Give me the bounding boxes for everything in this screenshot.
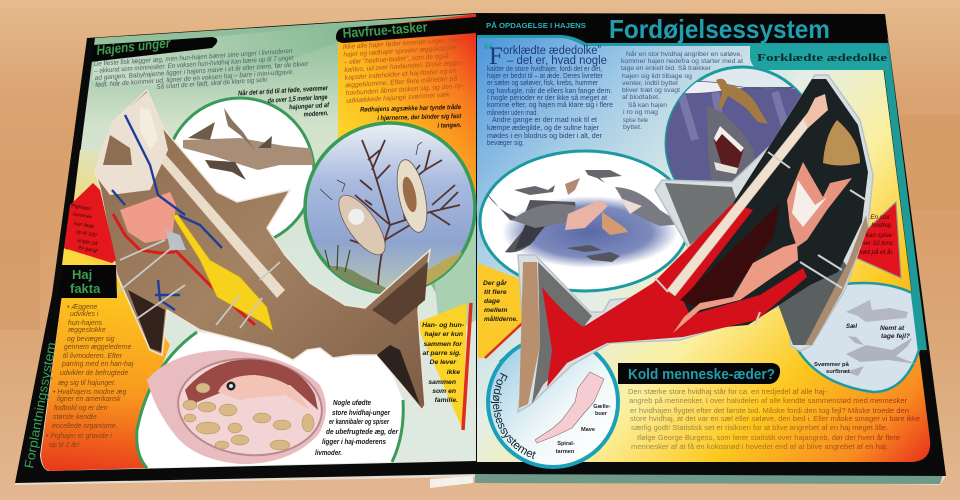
- kidney: [166, 230, 186, 250]
- right page background: [477, 35, 930, 462]
- text block: angreb på søløve: kommer hajen nedefra og starter med at: [621, 58, 743, 65]
- circle: sæl og surfbræt: surfbræt: [826, 369, 850, 375]
- text block: Haj fakta: æggestokke: [68, 327, 106, 334]
- text block: Kold menneske-æder: særlig godt! Statistisk set er risikoen for at blive angrebet af en haj meget lille.: [631, 423, 888, 432]
- text block: Haj fakta: • Æggene: [67, 304, 98, 311]
- text block: Forklædte ædedolke intro: og havfugle, når de ellers kan fange dem.: [487, 87, 612, 95]
- icon: søløve: [716, 79, 768, 124]
- callout: En stor hvidhaj: En stor: [870, 214, 891, 221]
- text block: Forklædte ædedolke intro: F: [489, 43, 503, 70]
- icon: surfbræt-silhuet: [846, 336, 916, 376]
- circle: Fordøjelsessystemet: Mave: [581, 427, 595, 433]
- text block: angreb på søløve: tage en enkelt bid. Så trækker: [621, 64, 712, 72]
- callout: Han- og hun-hajer: sammen for: [423, 341, 462, 348]
- text block: angreb på søløve: Så kan hajen: [628, 101, 667, 109]
- text note: Nogle ufødte: [315, 400, 399, 457]
- icon: æggekapsel venstre: [338, 194, 386, 256]
- text block: Kold menneske-æder: er hvidhajen flygtet efter det første bid. Måske fordi den tog fejl? Måske troede den: [630, 406, 909, 415]
- callout: Pighajen: Pighajen: [71, 203, 92, 212]
- callout: En stor hvidhaj: kan spise: [866, 232, 893, 239]
- text block: Havfrue-tasker: – eller ”havfrue-tasker”, som de også: [343, 52, 449, 66]
- text block: Kold menneske-æder: angreb på mennesker. I over halvdelen af alle kendte sammenstød med mennesker: [629, 396, 908, 405]
- pink stomach: [673, 243, 798, 333]
- icon: sæl: [846, 300, 908, 322]
- callout: Han- og hun-hajer: at parre sig.: [422, 350, 461, 357]
- callout: Pighajen: [62, 183, 116, 265]
- text block: Forklædte ædedolke intro: måneder uden mad.: [487, 109, 538, 117]
- icon: voksen haj: [183, 138, 314, 170]
- text block: angreb på søløve: [621, 50, 743, 131]
- shark shell: [518, 75, 873, 412]
- callout: Pighajen: kan føde: [74, 221, 95, 230]
- circle: sæl og surfbræt: Svømmer på: [814, 361, 850, 368]
- text note: Nogle ufødte: store hvidhaj-unger: [332, 410, 391, 417]
- side label: Forplantningssystem: Forplantningssystem: [21, 341, 59, 470]
- text block: Haj fakta: udvikler de befrugtede: [60, 370, 128, 377]
- circle: Fordøjelsessystemet: Gælle-: [593, 404, 611, 410]
- text block: Havfrue-tasker: havbunden åbner tasken sig, og den ny-: [346, 82, 464, 97]
- liver: [680, 203, 780, 307]
- text note: Nogle ufødte: de ubefrugtede æg, der: [326, 429, 399, 436]
- text block: Forklædte ædedolke intro: kalder de store hvidhajer, fordi det er det,: [487, 66, 602, 73]
- icon: æg: [183, 383, 314, 450]
- text block: Hajens unger: ad gangen. Babyhajerne ligger i hajens mave i et år eller mere, før de bliver: [95, 60, 309, 82]
- text block: Forklædte ædedolke intro: kæmpe ædegilde, og de sultne hajer: [487, 125, 600, 132]
- text block: Forklædte ædedolke intro: er sæler og søløver, fisk, krebs, hummer: [487, 80, 599, 87]
- text block: Kold menneske-æder: mennesker af at få en kokosnød i hovedet end af at blive angrebet af en haj.: [631, 442, 888, 451]
- dark shading: [128, 290, 165, 352]
- callout: Han- og hun-hajer: som en: [432, 388, 456, 395]
- circle: sæl og surfbræt: Sæl: [846, 324, 857, 330]
- text block: Kold menneske-æder: Den stærke store hvidhaj står for ca. en tredjedel af alle haj-: [628, 387, 828, 396]
- text block: Forklædte ædedolke intro: “: [483, 37, 494, 62]
- circular label: Fordøjelsessystemet: [490, 372, 536, 459]
- circle: livmoder: [137, 332, 403, 468]
- text block: Havfrue-tasker: kaldes, ud over havbunden. Disse ægge-: [344, 60, 463, 74]
- icon: hvidhaj: [707, 106, 754, 182]
- callout: Der går tit flere dage: tit flere: [484, 289, 507, 296]
- text block: Forklædte ædedolke intro: [483, 37, 613, 147]
- left shark model: [95, 90, 430, 410]
- icon: hajfoster: [218, 375, 310, 410]
- icon: tang-grene: [350, 140, 460, 285]
- text block: Haj fakta: • Hvalhajens modne æg: [53, 389, 126, 396]
- text block: Havfrue-tasker: hajer og rødhajer spreder æggekapsler: [343, 44, 458, 59]
- yellow tube: [172, 215, 273, 331]
- panel: Havfrue-tasker background: [338, 14, 476, 215]
- circle: Fordøjelsessystemet: [486, 343, 620, 469]
- text block: Forklædte ædedolke intro: I nogle perioder er der ikke så meget at: [487, 94, 607, 102]
- icon: sten og tang: [328, 266, 386, 292]
- text block: Forklædte ædedolke intro: bevæger sig.: [487, 140, 524, 147]
- callout: Pighajen: op til 100: [75, 229, 97, 239]
- panel: Haj fakta: fakta: [70, 281, 101, 296]
- book page edges: [15, 470, 946, 488]
- panel: Haj fakta: [58, 265, 117, 298]
- header kicker: PÅ OPDAGELSE I HAJENS: [486, 21, 586, 30]
- text block: Hajens unger: født. Når de kommer ud, ligner de en voksen haj – bare i mini-udgave.: [95, 68, 294, 89]
- shark body: [95, 90, 430, 410]
- callout: Pighajen: unger på: [77, 237, 98, 247]
- text block: angreb på søløve: bliver træt og svagt: [622, 87, 680, 94]
- right strip green panel: [430, 200, 476, 340]
- circle: haj angriber søløve: [664, 66, 802, 182]
- callout: Pighajen: én gang!: [77, 245, 99, 254]
- cream spine tube: [667, 97, 825, 296]
- icon: haj stor: [488, 194, 576, 252]
- text block: Hajens unger: Så snart de er født, skal de klare sig selv.: [156, 75, 269, 91]
- text note: Rødhajens ægsække: [360, 103, 462, 132]
- text block: Hajens unger: De fleste fisk lægger æg, men hun-hajen bærer sine unger i livmoderen: [94, 48, 293, 68]
- text block: Haj fakta: [46, 304, 134, 449]
- text block: Forklædte ædedolke intro: mødes i en blodrus og bider i alt, der: [487, 133, 603, 140]
- clear rods: [655, 152, 866, 325]
- icon: små hajer: [585, 170, 622, 183]
- text block: Havfrue-tasker: Ikke alle hajer føder levende unger. Hun-: [343, 36, 464, 51]
- text note: Når det er tid: Når det er tid til at føde, svømmer: [238, 84, 329, 97]
- blue lines: [112, 115, 222, 310]
- callout: Han- og hun-hajer: [416, 303, 471, 430]
- left page background: [40, 14, 476, 471]
- text block: angreb på søløve: byttet.: [623, 124, 642, 131]
- heading: Kold menneske-æder: Kold menneske-æder?: [628, 366, 775, 383]
- pink gill arches: [787, 162, 852, 247]
- callout: En stor hvidhaj: hvidhaj: [871, 222, 892, 229]
- callout: Han- og hun-hajer: Han- og hun-: [422, 322, 465, 329]
- text block: Haj fakta: største kendte: [53, 414, 97, 421]
- text block: Forklædte ædedolke intro: – det er, hvad nogle: [507, 55, 607, 67]
- callout: Han- og hun-hajer: familie.: [435, 397, 458, 404]
- left page cover (black): [15, 13, 477, 483]
- circle: sæl og surfbræt: [798, 283, 919, 392]
- heading: Hajens unger: Hajens unger: [96, 35, 172, 58]
- text block: Haj fakta: parring med en han-haj: [61, 361, 134, 368]
- callout: En stor hvidhaj: kød på et år.: [859, 249, 894, 256]
- circle: Fordøjelsessystemet: Spiral-: [557, 441, 575, 447]
- text note: Når det er tid: da over 1,5 meter lange: [267, 94, 328, 105]
- text block: angreb på søløve: i ro og mag: [623, 109, 658, 116]
- text block: Haj fakta: udvikles i: [70, 311, 99, 318]
- text block: Forklædte ædedolke intro: Andre gange er der mad nok til et: [492, 117, 597, 124]
- circle: sæl og surfbræt: Nemt at: [880, 325, 905, 332]
- callout: Der går tit flere dage: dage: [484, 298, 500, 305]
- text block: angreb på søløve: Når en stor hvidhaj angriber en søløve,: [626, 50, 742, 58]
- text block: Kold menneske-æder: store hvidhaj, at det var en sæl eller søløve, den bed i. Eller måske smager vi bare ikke: [630, 414, 920, 423]
- main title: Fordøjelsessystem: [609, 14, 830, 44]
- text block: Hajens unger: [93, 47, 310, 95]
- text note: Når det er tid: hajunger ud af: [289, 102, 330, 111]
- right page teal border: [880, 38, 927, 350]
- text block: Haj fakta: til livmoderen. Efter: [63, 353, 123, 360]
- circle: hajer i blodrus: [480, 151, 690, 291]
- text block: Haj fakta: hun-hajens: [68, 320, 103, 327]
- callout: Han- og hun-hajer: hajer er kun: [424, 331, 463, 338]
- circle: havfrue-tasker: [305, 123, 475, 300]
- text block: Forklædte ædedolke intro: orklædte ædedolke”: [503, 45, 601, 57]
- callout: Der går tit flere dage: Der går: [483, 279, 507, 287]
- right page cover (black): [476, 13, 946, 476]
- icon: livmoder: [147, 350, 326, 464]
- left page green upper area: [92, 14, 476, 300]
- text note: Rødhajens ægsække: i tangen.: [437, 122, 462, 130]
- left colour strip: [41, 150, 170, 471]
- icon: hvidhaj med åben mund: [615, 187, 674, 226]
- icon: bytte: [565, 200, 608, 230]
- heading: Havfrue-tasker: [336, 17, 476, 43]
- text block: Forklædte ædedolke intro: hajer er bedst til – at æde. Deres livretter: [487, 73, 604, 80]
- circle: Fordøjelsessystemet: tarmen: [556, 449, 575, 455]
- jaws: [95, 92, 168, 195]
- text note: Rødhajens ægsække: i hjørnerne, der binder sig fast: [377, 113, 462, 122]
- right shark model: [518, 75, 873, 412]
- callout: Der går tit flere dage: [478, 263, 532, 362]
- panel: Haj fakta: Haj: [72, 267, 92, 282]
- heading: Havfrue-tasker: Havfrue-tasker: [342, 19, 429, 41]
- text block: Kold menneske-æder: Ifølge George Burgess, som fører statistik over hajangreb, dør der hvert år flere: [637, 433, 900, 442]
- text block: Havfrue-tasker: [342, 36, 467, 105]
- callout: Han- og hun-hajer: De lever: [430, 359, 456, 366]
- callout: En stor hvidhaj: mer 10 tons: [860, 240, 893, 247]
- text block: Haj fakta: gennem æggelederne: [64, 344, 132, 351]
- text note: Nogle ufødte: er kannibaler og spiser: [329, 419, 390, 426]
- red body: [542, 203, 807, 387]
- head patch: [823, 120, 860, 166]
- gills: [120, 192, 176, 243]
- text block: Haj fakta: • Pighajer er gravide i: [46, 433, 112, 440]
- shark interior dark: [680, 79, 868, 330]
- text block: Hajens unger: – akkurat som mennesker. En voksen hun-hvidhaj kan bære op til 7 unger: [93, 55, 295, 75]
- text block: Forklædte ædedolke intro: komme efter, og hajen må klare sig i flere: [487, 101, 613, 109]
- text note: Nogle ufødte: ligger i haj-moderens: [322, 439, 386, 446]
- icon: æggekapsel højre: [396, 159, 428, 233]
- clear rods: [118, 240, 280, 328]
- circle: unge hajer: [172, 96, 315, 239]
- heading: Hajens unger: [90, 35, 217, 62]
- text block: Havfrue-tasker: æggeblomme. Efter flere måneder på: [345, 74, 458, 89]
- tab: Forklædte ædedolke: Forklædte ædedolke: [757, 53, 887, 64]
- callout: Der går tit flere dage: måltiderne.: [484, 315, 518, 323]
- text block: Haj fakta: op til 2 år!: [49, 441, 79, 449]
- circle: sæl og surfbræt: tage fejl?: [881, 333, 910, 340]
- circle: Fordøjelsessystemet: buer: [595, 411, 608, 417]
- text block: angreb på søløve: venter, indtil byttet: [622, 80, 678, 87]
- text note: Nogle ufødte: livmoder.: [315, 450, 342, 457]
- callout: Han- og hun-hajer: sammen: [428, 379, 456, 386]
- text block: Havfrue-tasker: udklækkede hajunge svømmer væk.: [346, 91, 451, 105]
- text block: Haj fakta: encellede organisme.: [52, 423, 118, 430]
- text block: Haj fakta: fodbold og er den: [54, 405, 108, 412]
- text block: Haj fakta: og bevæger sig: [67, 336, 115, 343]
- text note: Når det er tid: [238, 84, 330, 122]
- icon: fordøjelseskanal: [535, 372, 604, 443]
- callout: Der går tit flere dage: mellem: [484, 307, 507, 314]
- callout: Han- og hun-hajer: ikke: [447, 369, 460, 376]
- text block: Kold menneske-æder: [628, 387, 920, 451]
- header band: [477, 14, 888, 46]
- text block: Haj fakta: æg sig til hajunger.: [58, 380, 116, 387]
- cream rod: [150, 148, 285, 298]
- callout: Pighajen: hummer: [72, 211, 92, 221]
- text note: Nogle ufødte: Nogle ufødte: [333, 400, 371, 407]
- text block: Havfrue-tasker: kapsler indeholder et haj-foster og en: [345, 68, 457, 82]
- text block: angreb på søløve: spise hele: [623, 117, 648, 124]
- red lines: [113, 214, 270, 325]
- callout: En stor hvidhaj: [843, 202, 901, 278]
- text block: Haj fakta: ligner en amerikansk: [57, 396, 121, 403]
- text block: angreb på søløve: af blodtabet.: [622, 94, 660, 101]
- text block: angreb på søløve: hajen sig lidt tilbage og: [622, 73, 692, 80]
- icon: hajunge: [224, 108, 255, 150]
- text note: Når det er tid: moderen.: [303, 110, 329, 119]
- text note: Rødhajens ægsække: Rødhajens ægsække har tynde tråde: [360, 103, 461, 114]
- tab: Forklædte ædedolke: [750, 45, 889, 70]
